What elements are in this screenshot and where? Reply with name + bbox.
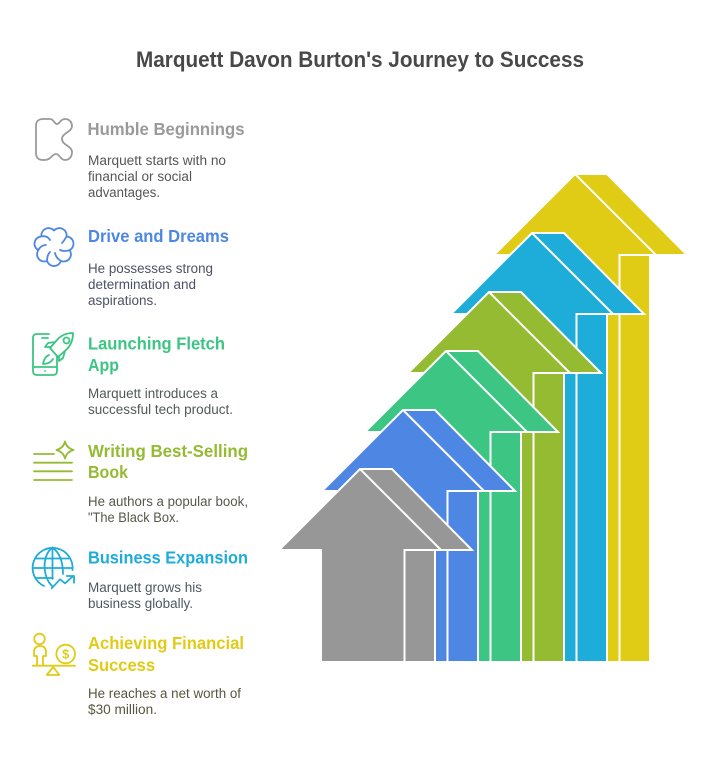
arrow: business expansion (cyan) xyxy=(451,233,644,662)
description: business globally. xyxy=(88,596,193,611)
description: determination and xyxy=(88,277,196,292)
icon: phone with rocket xyxy=(33,333,73,375)
description: advantages. xyxy=(88,185,160,200)
icon: swirling cloud xyxy=(34,228,74,266)
heading: Achieving Financial xyxy=(88,633,244,653)
icon: person balanced against money xyxy=(33,634,75,675)
icon: globe with growth arrow xyxy=(33,548,74,588)
arrow: achieving financial success (yellow) xyxy=(494,174,687,662)
description xyxy=(88,153,226,200)
panel: achieving financial success xyxy=(33,633,244,717)
panel: drive and dreams xyxy=(34,226,229,308)
description: He possesses strong xyxy=(88,261,213,276)
icon: text lines with sparkle xyxy=(34,442,74,480)
heading: Business Expansion xyxy=(88,548,248,568)
title: Marquett Davon Burton's Journey to Success xyxy=(136,47,584,72)
arrow: writing best-selling book (olive) xyxy=(408,292,601,662)
chart: stacked rising arrows xyxy=(279,174,687,662)
heading: Launching Fletch xyxy=(88,334,225,354)
description: $30 million. xyxy=(88,702,157,717)
panel: writing best-selling book xyxy=(34,441,248,525)
description xyxy=(88,580,202,611)
description: Marquett introduces a xyxy=(88,386,218,401)
description: Marquett grows his xyxy=(88,580,202,595)
heading: Drive and Dreams xyxy=(88,226,229,246)
description xyxy=(88,494,248,525)
panel: writing best-selling book: Book xyxy=(88,462,128,482)
heading: Humble Beginnings xyxy=(88,119,245,139)
description: successful tech product. xyxy=(88,402,233,417)
icon: abstract rounded shape xyxy=(36,119,72,160)
description: Marquett starts with no xyxy=(88,153,226,168)
description: financial or social xyxy=(88,169,192,184)
description xyxy=(88,261,213,308)
description xyxy=(88,686,241,717)
panel: launching fletch app xyxy=(33,333,233,417)
panel: business expansion xyxy=(33,548,248,611)
description: "The Black Box. xyxy=(88,510,179,525)
panel: humble beginnings xyxy=(36,119,245,200)
description: aspirations. xyxy=(88,293,157,308)
description: He authors a popular book, xyxy=(88,494,248,509)
arrow: drive and dreams (blue) xyxy=(322,410,515,662)
heading: Writing Best-Selling xyxy=(88,441,248,461)
arrow: launching fletch app (green) xyxy=(365,351,558,662)
icon text: dollar sign: $ xyxy=(62,648,69,662)
arrow: humble beginnings (gray) xyxy=(279,469,472,662)
description xyxy=(88,386,233,417)
description: He reaches a net worth of xyxy=(88,686,241,701)
panel: launching fletch app: App xyxy=(88,355,119,375)
panel: achieving financial success: Success xyxy=(88,655,155,675)
